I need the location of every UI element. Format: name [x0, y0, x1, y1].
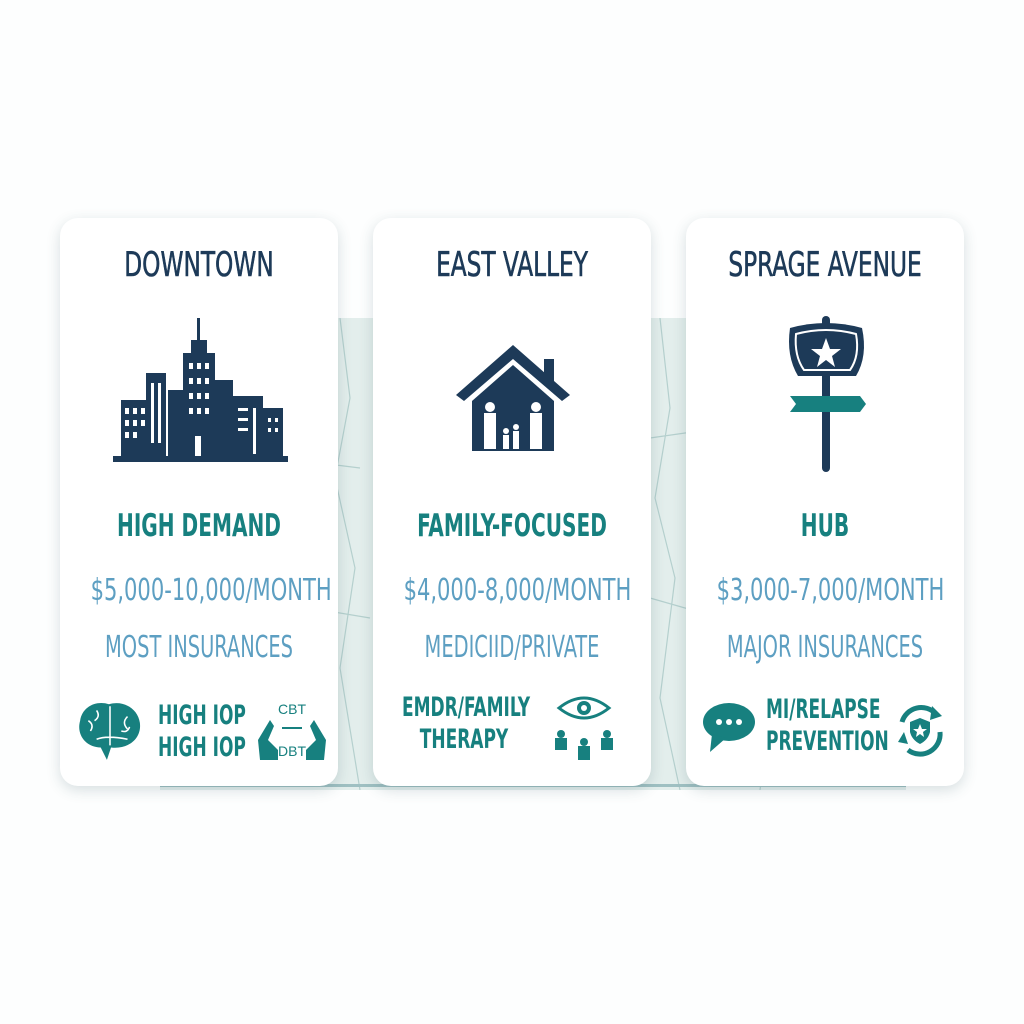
text: therapies: THERAPY: [420, 724, 508, 755]
text: therapies: MI/RELAPSE: [766, 694, 880, 725]
icon: cbt dbt hands: [258, 701, 326, 760]
subtitle: FAMILY-FOCUSED: [417, 508, 607, 544]
icon: cycle shield: [898, 705, 943, 757]
insurance: MEDICIID/PRIVATE: [425, 630, 599, 665]
subtitle: HIGH DEMAND: [117, 508, 281, 544]
subtitle: HUB: [801, 508, 849, 544]
price: $5,000-10,000/MONTH: [91, 573, 332, 608]
icon: road sign: [789, 316, 866, 472]
heading: sprage avenue: SPRAGE AVENUE: [728, 245, 922, 285]
text: therapies: EMDR/FAMILY: [402, 692, 530, 723]
icon: city skyline: [113, 318, 288, 462]
panel: sprage avenue: [686, 218, 964, 786]
text: therapies: [766, 694, 889, 757]
text: therapies: HIGH IOP: [158, 700, 246, 731]
price: $4,000-8,000/MONTH: [404, 573, 631, 608]
icon: cbt dbt hands: CBT: [278, 701, 306, 717]
icon: cbt dbt hands: DBT: [278, 743, 306, 759]
panel: east valley: [373, 218, 651, 786]
icon: speech bubble: [703, 703, 755, 752]
price: $3,000-7,000/MONTH: [717, 573, 944, 608]
panel: downtown: [60, 218, 338, 786]
heading: east valley: EAST VALLEY: [436, 245, 588, 285]
text: therapies: HIGH IOP: [158, 732, 246, 763]
text: therapies: [402, 692, 530, 755]
insurance: MOST INSURANCES: [105, 630, 293, 665]
icon: brain: [79, 703, 140, 760]
text: therapies: PREVENTION: [766, 726, 889, 757]
heading: downtown: DOWNTOWN: [124, 245, 274, 285]
icon: eye and people: [555, 696, 613, 760]
text: therapies: [158, 700, 246, 763]
insurance: MAJOR INSURANCES: [727, 630, 923, 665]
icon: family house: [456, 345, 570, 451]
background map: [160, 318, 906, 790]
